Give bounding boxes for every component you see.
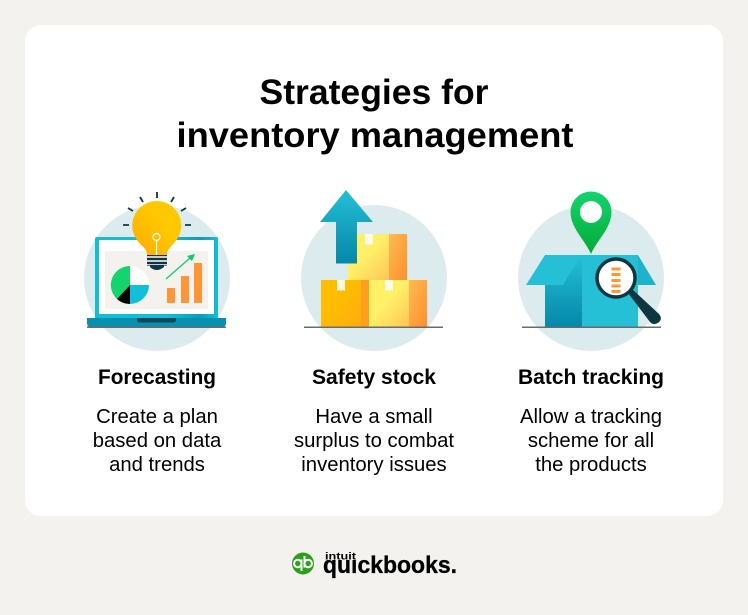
trend arrow (166, 254, 195, 279)
bar chart (167, 263, 202, 303)
icon: forecasting laptop and light bulb (84, 192, 230, 351)
text: batch tracking description: the products (535, 454, 647, 476)
heading: Batch tracking: Batch tracking (518, 366, 664, 389)
icon: batch tracking box with pin and magnifier (518, 192, 664, 351)
text: forecasting description: Create a plan (96, 406, 218, 428)
logo: intuit quickbooks: intuit (325, 552, 357, 562)
text: batch tracking description: scheme for all (528, 430, 654, 452)
text: safety stock description (294, 406, 454, 476)
location pin (570, 192, 612, 254)
heading: Forecasting: Forecasting (98, 366, 216, 389)
heading: Safety stock: Safety stock (312, 366, 436, 389)
icon: safety stock boxes and arrow (301, 190, 447, 351)
text: safety stock description: surplus to combat (294, 430, 454, 452)
pie chart (111, 266, 149, 304)
title: inventory management (176, 115, 574, 155)
text: forecasting description: based on data (93, 430, 222, 452)
magnifier (597, 259, 661, 324)
text: safety stock description: inventory issues (301, 454, 447, 476)
title: Strategies for (260, 72, 489, 112)
light bulb (132, 201, 181, 270)
logo: intuit quickbooks: quickbooks. (323, 552, 457, 579)
text: batch tracking description (520, 406, 662, 476)
text: batch tracking description: Allow a tracking (520, 406, 662, 428)
panel: white card (25, 25, 723, 516)
title (176, 72, 574, 155)
text: forecasting description (93, 406, 222, 476)
text: forecasting description: and trends (109, 454, 205, 476)
text: safety stock description: Have a small (315, 406, 433, 428)
